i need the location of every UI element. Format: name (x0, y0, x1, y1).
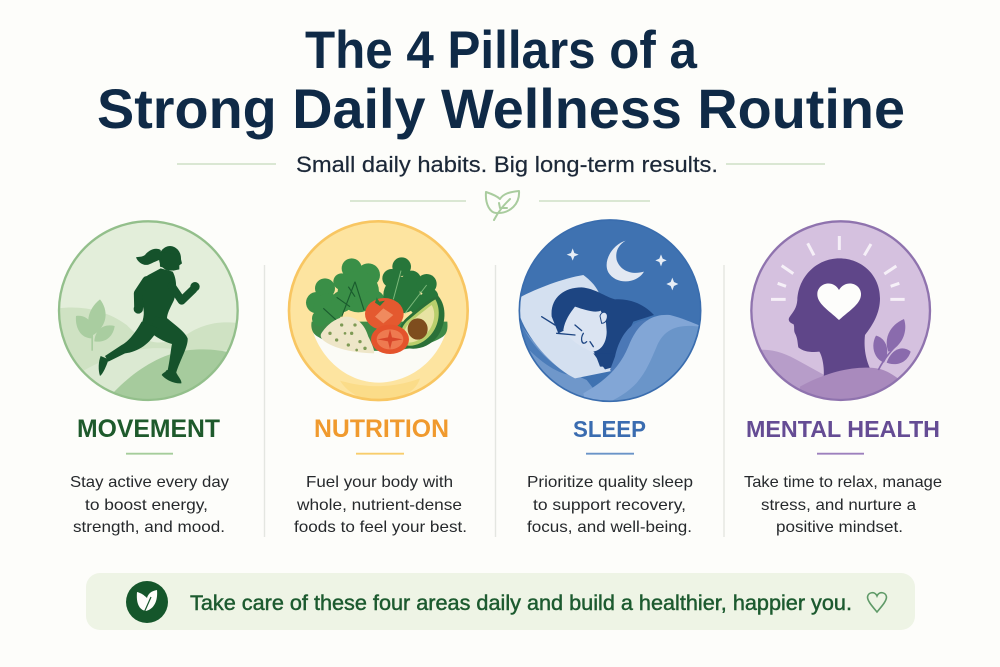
text: mental health description: positive mindset. (776, 519, 903, 536)
text: nutrition description: whole, nutrient-dense (296, 497, 462, 514)
text: movement description (70, 474, 229, 536)
icon: leaf badge (126, 581, 168, 623)
icon: sleeping woman circle (517, 220, 703, 410)
panel: nutrition (289, 221, 468, 536)
icon: salad bowl circle (289, 221, 468, 401)
text: movement description: to boost energy, (85, 497, 208, 514)
pillow (520, 275, 611, 378)
moon (607, 241, 644, 281)
heading: movement: MOVEMENT (77, 415, 220, 443)
title (97, 21, 905, 140)
avocado (398, 296, 444, 349)
rays (771, 236, 905, 299)
rice (321, 317, 374, 353)
text: sleep description: Prioritize quality sleep (527, 474, 693, 491)
subtitle: Small daily habits. Big long-term results. (296, 152, 718, 177)
heading: mental health: MENTAL HEALTH (746, 416, 940, 442)
face (563, 307, 607, 352)
text: sleep description: focus, and well-being. (527, 519, 692, 536)
icon: plant sprig (76, 299, 115, 351)
icon: leaf divider (486, 191, 519, 220)
text: mental health description: stress, and nurture a (761, 497, 916, 514)
panel: mental health (744, 221, 942, 536)
icon: purple sprig (873, 319, 911, 370)
stars (567, 248, 678, 290)
text: nutrition description (294, 474, 467, 536)
head silhouette (789, 258, 880, 380)
text: nutrition description: foods to feel your best. (294, 519, 467, 536)
bowl (312, 327, 447, 383)
tomato back (365, 298, 404, 330)
text: mental health description: Take time to relax, manage (744, 474, 942, 491)
icon: runner circle (57, 221, 240, 410)
salad leaves (306, 258, 385, 326)
icon: running woman (99, 246, 200, 383)
icon: mind circle (750, 221, 930, 410)
hair (552, 287, 654, 367)
callout text: Take care of these four areas daily and build a healthier, happier you. (190, 592, 852, 615)
panel: movement (57, 221, 240, 536)
callout banner (86, 573, 915, 630)
title: The 4 Pillars of a (305, 21, 697, 80)
title: Strong Daily Wellness Routine (97, 77, 905, 140)
heading: nutrition: NUTRITION (314, 415, 449, 443)
icon: heart outline (868, 593, 886, 612)
tomato front (371, 325, 409, 354)
lower bedding (522, 327, 592, 397)
text: movement description: Stay active every day (70, 474, 229, 491)
text: movement description: strength, and mood. (73, 519, 225, 536)
text: mental health description (744, 474, 942, 536)
icon: heart (817, 283, 861, 320)
panel: sleep (517, 220, 703, 536)
blanket (610, 320, 647, 372)
text: sleep description (527, 474, 693, 536)
text: sleep description: to support recovery, (533, 497, 686, 514)
heading: sleep: SLEEP (573, 416, 646, 442)
text: nutrition description: Fuel your body with (306, 474, 453, 491)
